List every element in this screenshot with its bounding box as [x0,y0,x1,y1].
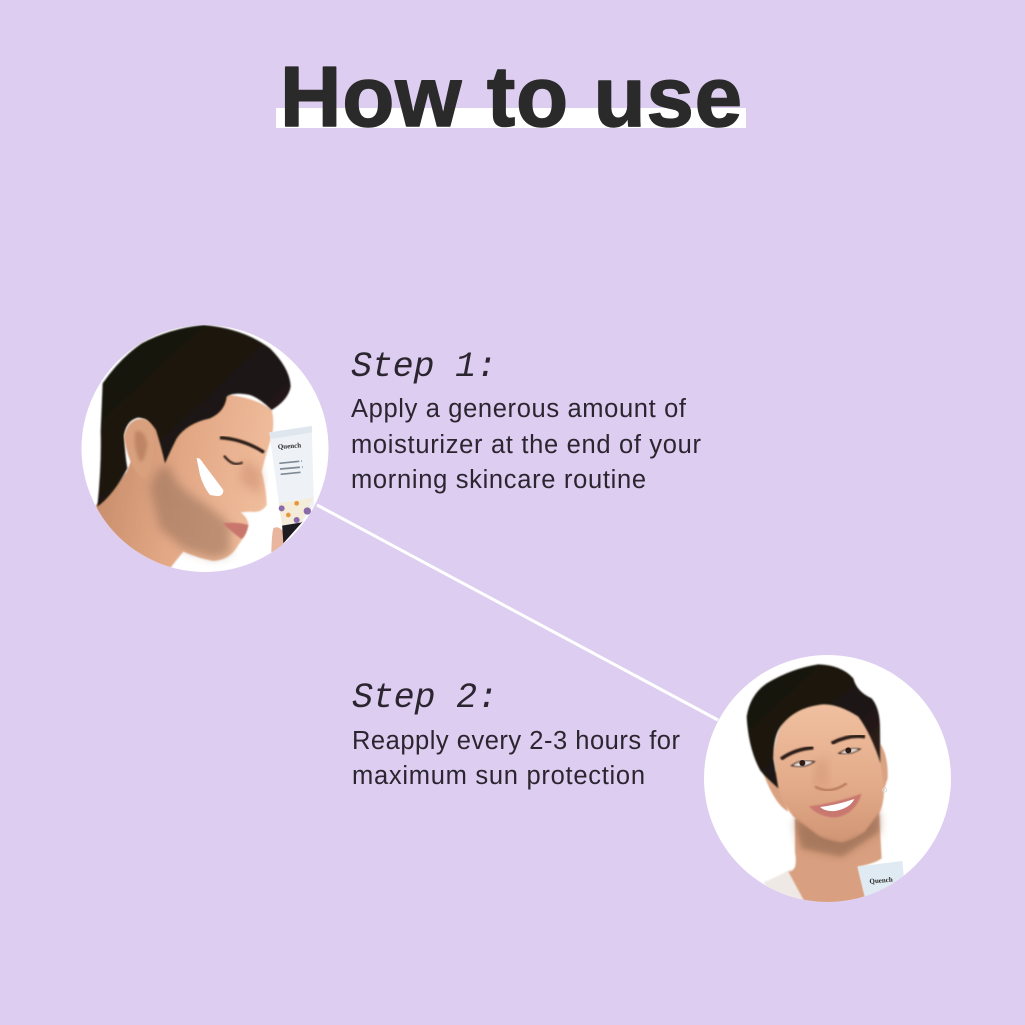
photo: man applying moisturizer: Quench [278,441,301,451]
eyebrows [781,748,813,759]
eyebrow and closed eye [220,438,264,452]
step 1 text [351,347,702,494]
ears [763,772,788,812]
step 2 text [352,678,680,790]
step 2 text: Reapply every 2-3 hours for [352,727,680,755]
step 1 text: Step 1: [351,347,497,387]
ear [123,418,153,465]
photo: smiling man with product [704,655,951,908]
smile [809,794,862,818]
finger [271,527,283,552]
hair [747,664,880,788]
step 1 text: moisturizer at the end of your [351,431,702,459]
hair [97,325,291,507]
step 1 text: morning skincare routine [351,466,646,494]
product tube [858,861,905,897]
earring [883,788,887,792]
t-shirt [764,869,804,900]
face [773,703,884,842]
photo: smiling man with product: Quench [869,876,893,886]
title: How to use: How to use [280,50,742,145]
cap of tube [282,522,303,543]
photo: man applying moisturizer [82,325,328,572]
eyes [792,761,814,767]
nose [815,783,847,790]
infographic canvas [82,66,951,902]
product tube [269,426,314,526]
stubble [793,812,880,857]
neck [788,812,882,908]
step 2 text: Step 2: [352,678,498,718]
lips [223,523,248,539]
step 2 text: maximum sun protection [352,762,645,790]
neck and face [96,395,273,572]
connector line between steps [317,505,718,720]
stubble [150,465,230,558]
step 1 text: Apply a generous amount of [351,395,687,423]
cream swipe [197,458,223,496]
